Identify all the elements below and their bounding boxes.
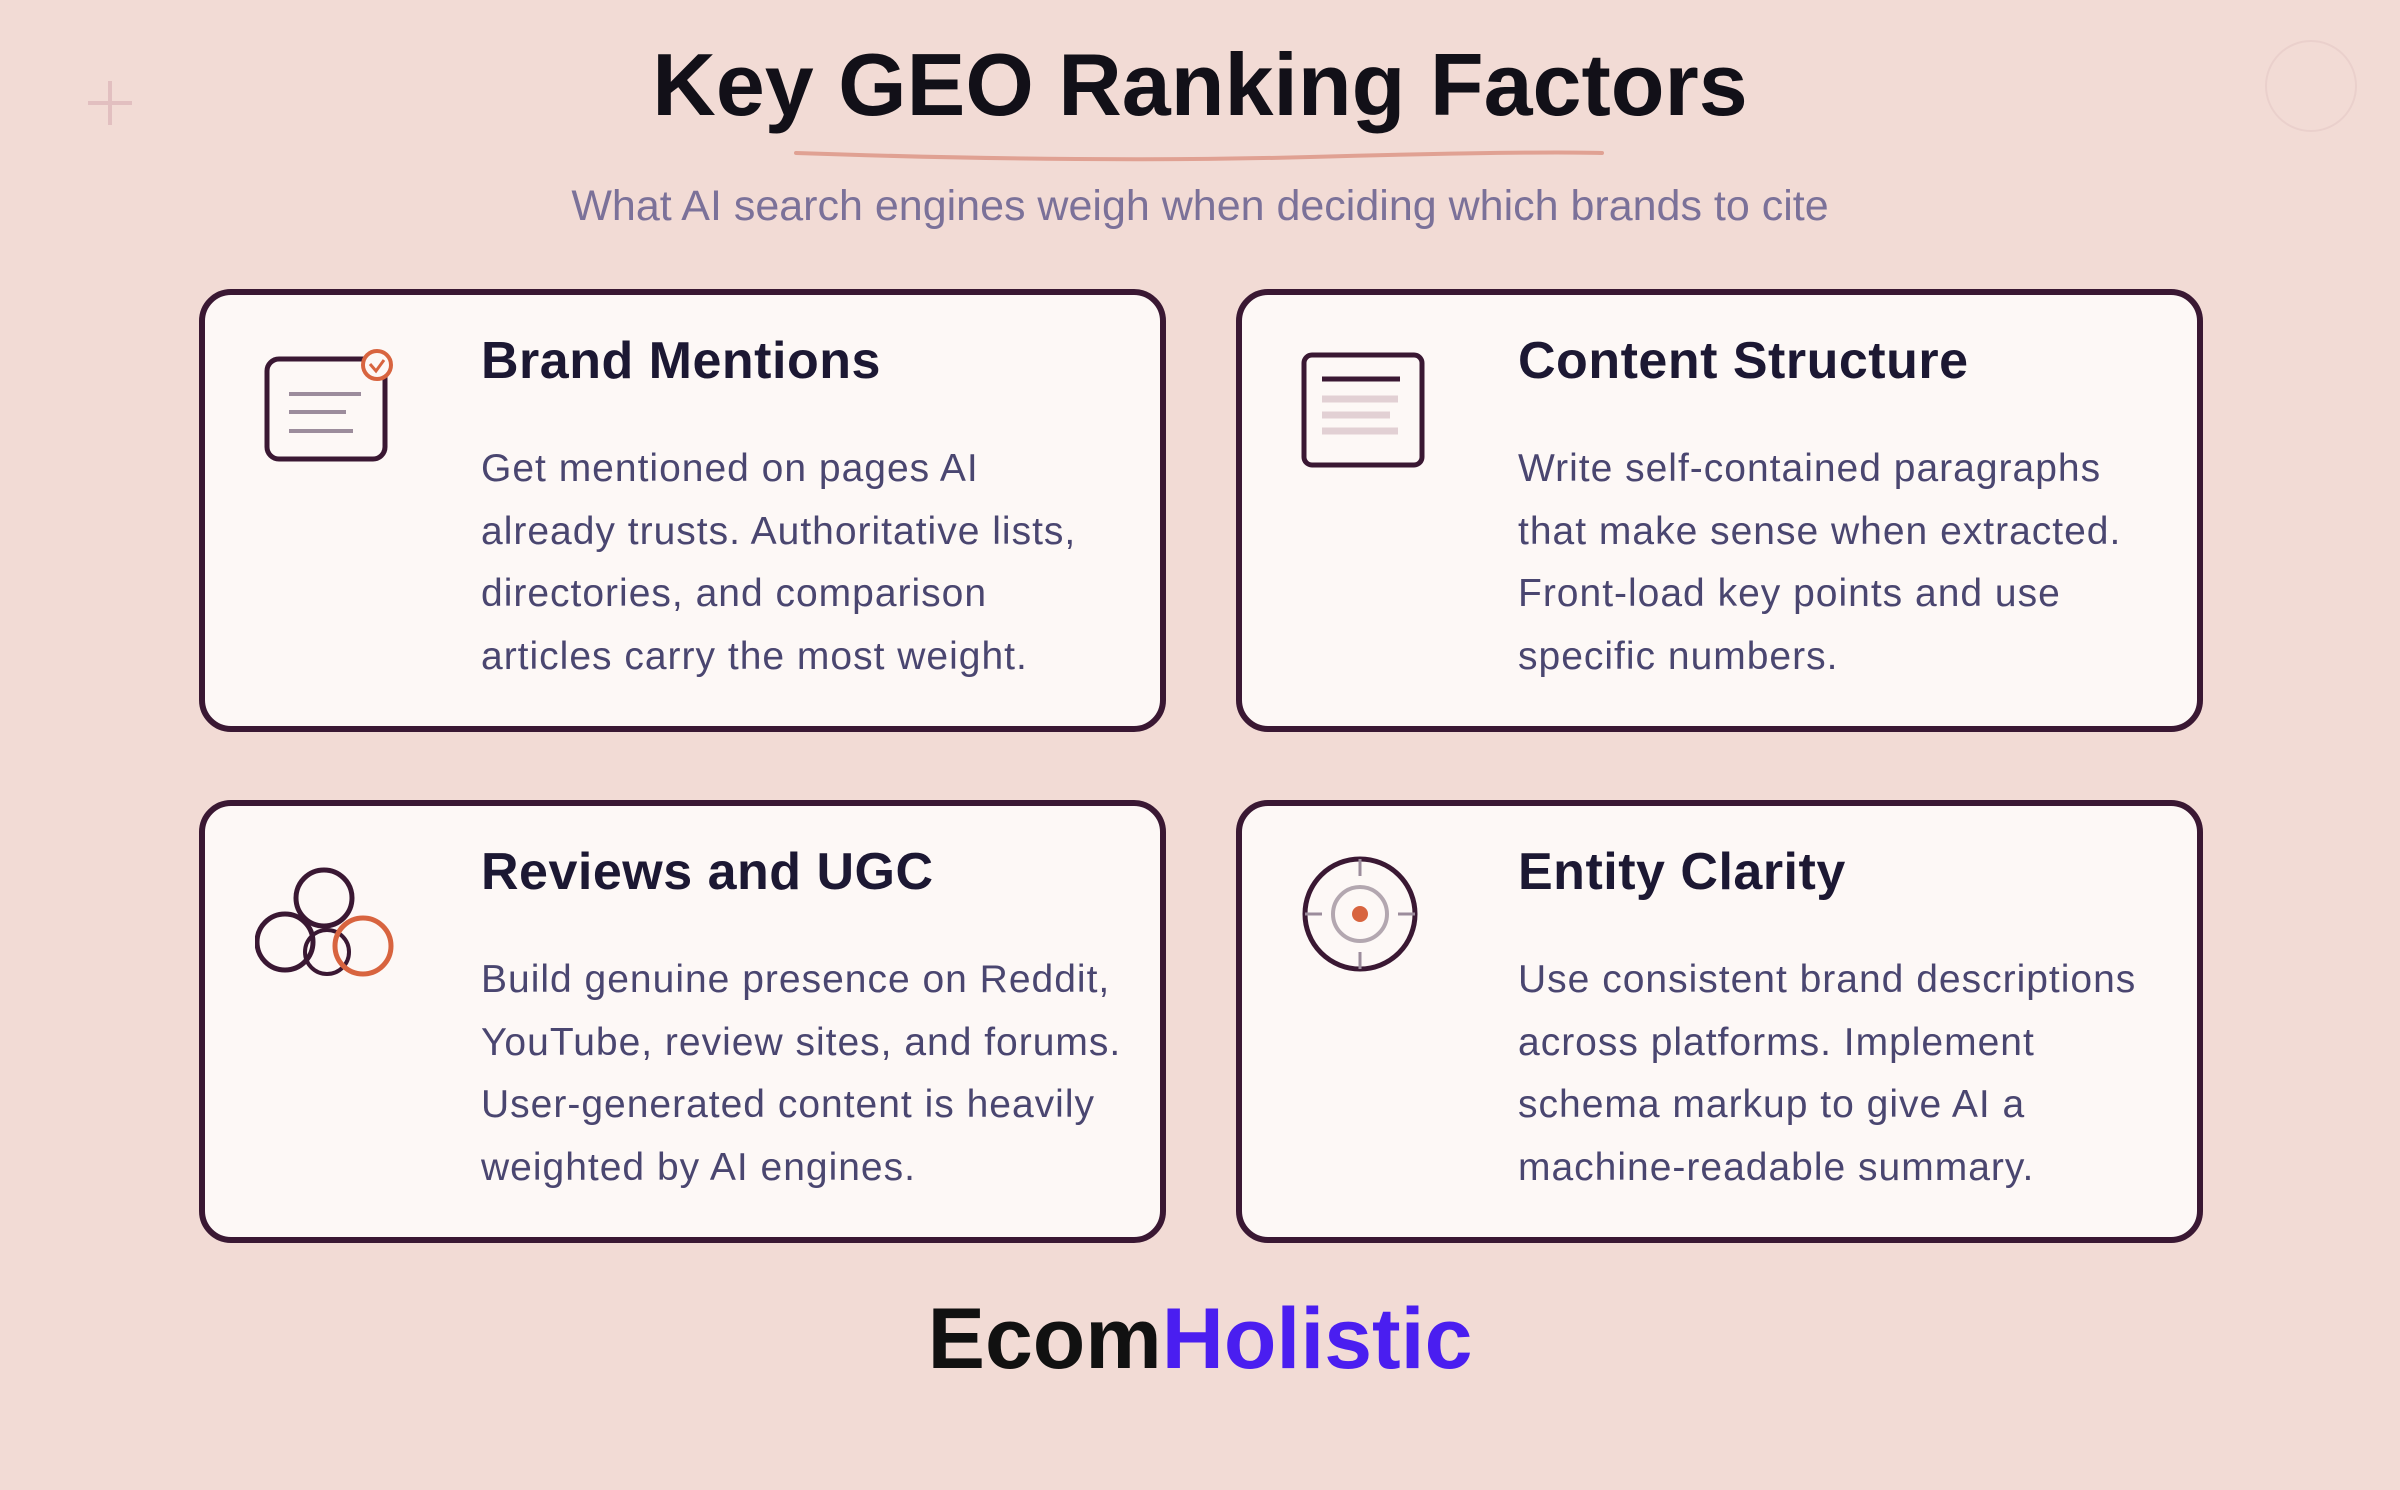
body text: User-generated content is heavily [481, 1083, 1095, 1126]
body text: Front-load key points and use [1518, 572, 2061, 615]
icon: target [1302, 856, 1418, 972]
icon: document with check [264, 349, 393, 462]
body text [481, 447, 1076, 678]
body text: that make sense when extracted. [1518, 510, 2121, 552]
panel: reviews and UGC [199, 800, 1166, 1243]
heading: Reviews and UGC [481, 843, 934, 901]
subtitle: What AI search engines weigh when deciding which brands to cite [571, 182, 1829, 230]
body text: Use consistent brand descriptions [1518, 958, 2136, 1001]
body text: articles carry the most weight. [481, 634, 1028, 678]
body text: weighted by AI engines. [481, 1146, 916, 1188]
body text: Write self-contained paragraphs [1518, 447, 2101, 490]
body text: specific numbers. [1518, 634, 1838, 678]
footer logo: EcomHolistic [928, 1291, 1472, 1387]
body text: Get mentioned on pages AI [481, 447, 979, 490]
heading: Brand Mentions [481, 332, 881, 390]
body text: YouTube, review sites, and forums. [481, 1020, 1121, 1064]
body text: already trusts. Authoritative lists, [481, 510, 1076, 552]
title: Key GEO Ranking Factors [652, 35, 1748, 134]
body text [1518, 958, 2136, 1188]
decoration: plus [88, 81, 132, 125]
icon: overlapping circles [255, 868, 394, 976]
body text [481, 958, 1121, 1188]
body text: Build genuine presence on Reddit, [481, 958, 1110, 1001]
heading: Entity Clarity [1518, 843, 1846, 901]
decoration: circle [2265, 40, 2357, 132]
panel: brand mentions [199, 289, 1166, 732]
body text: machine-readable summary. [1518, 1146, 2034, 1188]
title underline [794, 150, 1604, 162]
body text: directories, and comparison [481, 572, 987, 615]
heading: Content Structure [1518, 332, 1968, 390]
panel: entity clarity [1236, 800, 2203, 1243]
body text [1518, 447, 2121, 678]
panel: content structure [1236, 289, 2203, 732]
icon: structured page [1302, 352, 1424, 468]
body text: across platforms. Implement [1518, 1020, 2035, 1064]
body text: schema markup to give AI a [1518, 1083, 2025, 1126]
